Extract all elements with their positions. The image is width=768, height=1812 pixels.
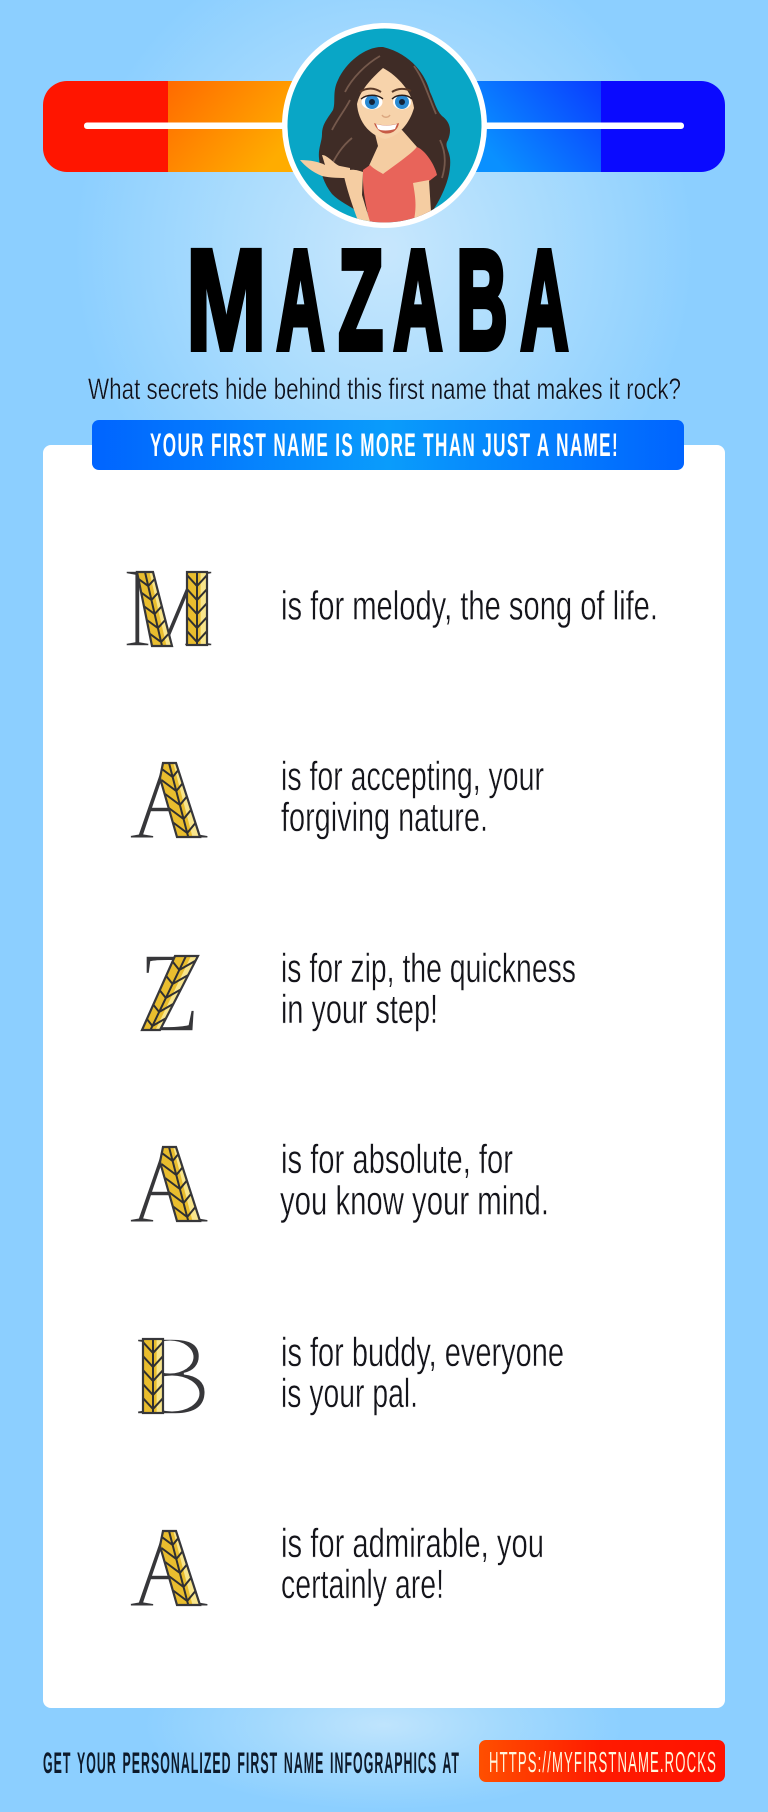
letter row: Z: in your step! <box>281 986 438 1032</box>
title: A <box>277 222 324 378</box>
letter row: A: forgiving nature. <box>281 794 488 840</box>
white bar line <box>84 122 684 129</box>
content panel <box>43 445 725 1708</box>
letter row: Z <box>140 952 575 1032</box>
letter row: M <box>126 570 656 648</box>
letter row: B <box>138 1336 563 1416</box>
icon: wheat letter B <box>138 1338 205 1414</box>
text: A <box>521 222 568 378</box>
icon: wheat letter A: A <box>129 1120 209 1247</box>
icon: wheat letter A <box>130 1146 208 1222</box>
text: A line: is for accepting, your <box>281 753 544 799</box>
icon: wheat letter A: A <box>129 736 209 863</box>
letter row: A second: you know your mind. <box>280 1178 549 1224</box>
icon: wheat letter Z: Z <box>138 929 200 1056</box>
text: A line two: is for absolute, for <box>281 1136 513 1182</box>
footer url button <box>479 1740 725 1782</box>
text: B line: is for buddy, everyone <box>281 1329 564 1375</box>
icon: wheat letter M: M <box>123 544 215 671</box>
icon: wheat letter B: B <box>134 1312 211 1439</box>
text: A line three: is for admirable, you <box>281 1520 544 1566</box>
title: Z <box>338 220 383 378</box>
title: M <box>186 220 266 380</box>
icon: wheat letter M <box>126 570 212 648</box>
icon: wheat letter Z <box>140 954 200 1032</box>
letter row: A third: certainly are! <box>281 1561 444 1607</box>
banner <box>92 420 684 470</box>
portrait medallion <box>282 23 487 228</box>
icon: wheat letter A <box>130 1530 208 1606</box>
text: Z line: is for zip, the quickness <box>281 945 576 991</box>
letter row: A second <box>130 1144 546 1223</box>
icon: wheat letter A <box>130 762 208 838</box>
title: B <box>456 220 508 378</box>
letter row: B: is your pal. <box>281 1370 418 1416</box>
icon: wheat letter A: A <box>129 1504 209 1631</box>
header colour bar <box>43 81 725 172</box>
letter row: A <box>130 760 544 840</box>
letter row: A third <box>130 1528 542 1606</box>
title: A <box>394 222 442 378</box>
